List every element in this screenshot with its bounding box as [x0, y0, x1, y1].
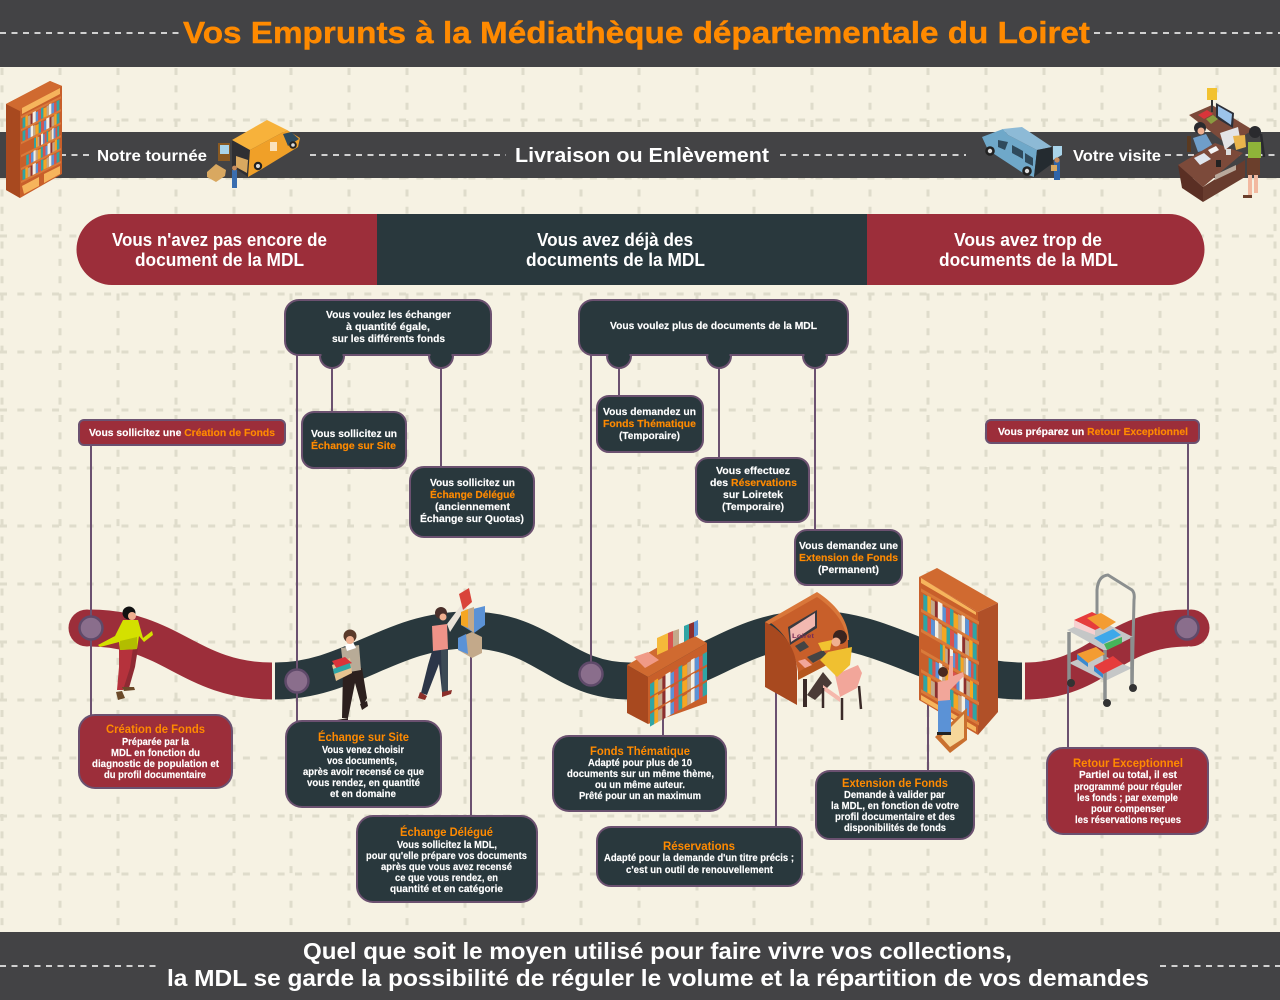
footer band [0, 932, 1280, 1000]
title: Vos Emprunts à la Médiathèque départementale du Loiret [183, 15, 1090, 50]
icon: reception desk with two people [1178, 88, 1264, 202]
timeline nodes [80, 616, 1198, 692]
footer message: la MDL se garde la possibilité de réguler le volume et la répartition de vos demandes [167, 965, 1149, 991]
title band [0, 0, 1280, 67]
box: make reservations: (Temporaire) [722, 501, 784, 513]
ribbon path [68, 610, 1210, 681]
description: Extension de Fonds: profil documentaire et des [835, 811, 955, 823]
description: Échange sur Site: après avoir recensé ce que [303, 766, 424, 778]
description: Échange sur Site: Vous venez choisir [322, 744, 404, 756]
description: Création de Fonds [79, 715, 232, 788]
description: Fonds Thématique [553, 736, 726, 811]
banner text: no documents yet [112, 230, 327, 270]
description: Réservations: Adapté pour la demande d'un titre précis ; [604, 852, 794, 864]
delivery road [0, 132, 1280, 178]
description: Retour Exceptionnel: programmé pour réguler [1074, 781, 1182, 793]
illustration: tall bookcase with man on ladder [919, 568, 998, 753]
banner text: no documents yet: Vous n'avez pas encore de [112, 230, 327, 250]
description: Échange Délégué: ce que vous rendez, en [395, 872, 498, 884]
description: Fonds Thématique: Fonds Thématique [590, 744, 690, 758]
connector lines [91, 354, 1188, 827]
box: make reservations: sur Loiretek [723, 489, 783, 501]
description: Échange sur Site: vous rendez, en quantité [307, 777, 420, 789]
road label: Notre tournée: Notre tournée [97, 148, 207, 165]
callout: want more documents [579, 300, 848, 368]
description: Échange Délégué: après que vous avez recensé [381, 861, 512, 873]
box: request delegated exchange: Échange Délégué [430, 488, 515, 501]
description: Échange Délégué: pour qu'elle prépare vos documents [366, 850, 527, 862]
footer message [167, 938, 1149, 991]
description: Retour Exceptionnel: les fonds ; par exemple [1077, 792, 1178, 804]
icon: bookcase top left [6, 81, 62, 198]
tag: request creation of collection [79, 420, 285, 445]
banner text: too many documents: Vous avez trop de [954, 230, 1102, 250]
box: request thematic collection: (Temporaire) [619, 430, 680, 442]
description: Échange Délégué [357, 816, 537, 902]
illustration: study carrel with reader: Loiret [792, 633, 815, 640]
description: Extension de Fonds: Demande à valider par [844, 789, 945, 801]
illustration: woman carrying books [332, 630, 368, 724]
box: request delegated exchange [410, 467, 534, 537]
box: request delegated exchange: Vous sollicitez un [430, 477, 515, 489]
description: Création de Fonds: Préparée par la [122, 736, 189, 748]
banner text: too many documents [939, 230, 1118, 270]
description: Extension de Fonds [816, 771, 974, 839]
illustration: woman reaching for books [418, 588, 485, 700]
illustration: low bookcase [627, 620, 707, 727]
description: Création de Fonds: diagnostic de population et [92, 758, 219, 770]
situation banner [76, 214, 1204, 285]
description: Échange sur Site: vos documents, [327, 755, 397, 767]
description: Création de Fonds: MDL en fonction du [111, 747, 200, 759]
description: Échange sur Site: et en domaine [330, 788, 396, 800]
description: Réservations: Réservations [663, 839, 735, 853]
box: make reservations: des Réservations [710, 477, 797, 489]
description: Extension de Fonds: Extension de Fonds [842, 776, 948, 790]
description: Échange sur Site: Échange sur Site [318, 729, 409, 744]
description: Réservations [597, 827, 802, 886]
banner text: too many documents: documents de la MDL [939, 250, 1118, 270]
tag: prepare exceptional return [986, 420, 1199, 443]
box: make reservations: Vous effectuez [716, 465, 790, 477]
description: Réservations: c'est un outil de renouvellement [626, 864, 773, 876]
box: request thematic collection [597, 396, 703, 452]
box: request collection extension: Extension de Fonds [799, 552, 898, 564]
description: Fonds Thématique: Adapté pour plus de 10 [588, 757, 692, 769]
box: make reservations [696, 458, 809, 522]
tag: prepare exceptional return: Vous préparez un Retour Exceptionnel [998, 426, 1188, 438]
callout: want to exchange: Vous voulez les échanger [326, 309, 451, 321]
description: Extension de Fonds: disponibilités de fonds [844, 822, 946, 834]
callout: want to exchange: à quantité égale, [346, 321, 430, 333]
callout: want more documents: Vous voulez plus de documents de la MDL [610, 320, 818, 332]
description: Création de Fonds: Création de Fonds [106, 722, 205, 736]
box: request delegated exchange: Échange sur Quotas) [420, 512, 524, 525]
box: request on-site exchange [302, 412, 406, 468]
description: Création de Fonds: du profil documentaire [104, 769, 206, 781]
description: Retour Exceptionnel [1047, 748, 1208, 834]
banner text: no documents yet: document de la MDL [135, 250, 304, 270]
box: request thematic collection: Vous demandez un [603, 406, 696, 418]
box: request collection extension [795, 530, 902, 585]
banner text: already have documents [526, 230, 705, 270]
description: Échange Délégué: quantité et en catégorie [390, 883, 503, 895]
footer message: Quel que soit le moyen utilisé pour faire vivre vos collections, [303, 938, 1012, 964]
icon: orange delivery van [207, 120, 300, 188]
illustration: library trolley [1067, 575, 1137, 707]
banner text: already have documents: documents de la MDL [526, 250, 705, 270]
description: Fonds Thématique: ou un même auteur. [595, 779, 685, 791]
box: request on-site exchange: Vous sollicitez un [311, 428, 397, 440]
description: Retour Exceptionnel: les réservations reçues [1075, 814, 1181, 826]
box: request collection extension: Vous demandez une [799, 540, 898, 552]
box: request on-site exchange: Échange sur Site [311, 439, 396, 452]
box: request thematic collection: Fonds Thématique [603, 418, 696, 430]
callout: want to exchange: sur les différents fonds [332, 333, 445, 345]
box: request delegated exchange: (anciennement [435, 501, 510, 513]
description: Extension de Fonds: la MDL, en fonction de votre [831, 800, 959, 812]
illustration: study carrel with reader [765, 592, 862, 720]
icon: blue car [982, 127, 1062, 180]
banner text: already have documents: Vous avez déjà des [537, 230, 693, 250]
description: Fonds Thématique: Prêté pour un an maximum [579, 790, 701, 802]
road label: Votre visite: Votre visite [1073, 148, 1161, 165]
description: Retour Exceptionnel: Retour Exceptionnel [1073, 756, 1183, 770]
description: Retour Exceptionnel: pour compenser [1091, 803, 1165, 815]
description: Échange Délégué: Échange Délégué [400, 824, 493, 839]
box: request collection extension: (Permanent) [818, 564, 879, 576]
illustration: woman in yellow top [98, 606, 153, 700]
description: Fonds Thématique: documents sur un même thème, [567, 768, 714, 780]
callout: want to exchange [285, 300, 491, 368]
description: Échange sur Site [286, 721, 441, 807]
description: Retour Exceptionnel: Partiel ou total, il est [1079, 769, 1177, 781]
description: Échange Délégué: Vous sollicitez la MDL, [397, 839, 497, 851]
tag: request creation of collection: Vous sollicitez une Création de Fonds [89, 427, 275, 439]
road label: Livraison ou Enlèvement: Livraison ou Enlèvement [515, 145, 769, 167]
